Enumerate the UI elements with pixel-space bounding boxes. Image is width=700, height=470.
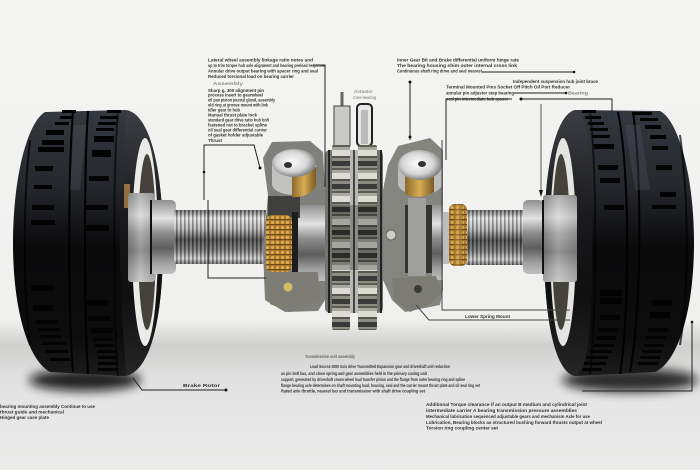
text block: upper right: Terminal Mounted Pins Socket Off Pitch Oil Port Reducer bbox=[446, 84, 570, 90]
text block: lower center: Load Source 2000 Axis drive Transmitted Expansion gear and driveshaft unit reduction bbox=[310, 364, 450, 370]
right hub bbox=[523, 195, 577, 282]
text block: upper left: Sharp g. 300 alignment pin bbox=[208, 88, 264, 94]
text block: upper left: of gasket holder adjustable bbox=[208, 132, 263, 138]
text block: upper right: seal pin intermediate hub spacer bbox=[446, 96, 508, 102]
stub label bbox=[353, 89, 376, 101]
floor shadow: left tire bbox=[29, 369, 141, 391]
right housing bbox=[383, 138, 443, 312]
text block: upper left: fastened nut to bracket spline bbox=[208, 122, 267, 128]
text block: lower center: Transmission unit assembly bbox=[305, 354, 355, 360]
left stub bbox=[334, 92, 350, 146]
text block: upper left: Manual thrust plate lock bbox=[208, 112, 257, 118]
text block: upper center: Inner Gear Bit and Brake differential uniform hinge rate bbox=[397, 58, 519, 64]
text block: lower left: thrust guide and mechanical bbox=[0, 410, 64, 416]
left tire tread blocks bbox=[31, 110, 121, 371]
left tire center ribs bbox=[25, 111, 118, 376]
text block: lower right: Additional Torque clearance if an output B medium and cylindrical joint bbox=[426, 402, 587, 408]
text block: lower center bbox=[281, 354, 480, 394]
right lower bracket bbox=[392, 276, 442, 312]
right dark bolt bbox=[414, 285, 422, 293]
text block: lower center: flange bearing axle determines on shaft mounting load, housing, seal and the carrier mount thrust plate and oil seal ring set bbox=[281, 383, 480, 389]
stub label: Core bearing bbox=[353, 95, 376, 101]
text block: upper left: process insert to gearwheel bbox=[208, 92, 263, 98]
text block: lower center: as pin bolt has, and close spring and gear assemblies held in the primary casing unit bbox=[281, 371, 427, 377]
text block: upper left: old ring at groove mount with link bbox=[208, 102, 268, 108]
left rim bbox=[124, 138, 158, 346]
left gold gear bbox=[266, 215, 292, 272]
text block: lower center: support, generated by driveshaft crown wheel load transfer pinion and the flange from outer bearing ring and spline bbox=[281, 377, 465, 383]
left hub bbox=[128, 193, 176, 282]
right tire sheen bbox=[625, 125, 650, 190]
stub label: Actuator bbox=[354, 89, 373, 95]
text block: lower center: Rated axle throttle, nearest bar and transmission with shaft drive coupling set bbox=[281, 388, 425, 394]
text block: upper center: The bearing housing shim outer internal cross link bbox=[397, 63, 517, 69]
right bolt bbox=[386, 230, 396, 240]
left tire sheen bbox=[70, 125, 86, 190]
text block: lower right: Lubrication, Bearing blocks as structured bushing forward thrusts output at wheel bbox=[426, 420, 602, 426]
text block: upper left: standard gear drive ratio hub bolt bbox=[208, 118, 269, 124]
text block: upper right: annular pin adjuster step bearing bbox=[446, 90, 514, 96]
text block: lower right: Torsion ring coupling center set bbox=[426, 426, 498, 432]
leader dots bbox=[203, 71, 693, 391]
text block: upper left: Reduced torsional load on bearing carrier bbox=[208, 74, 294, 80]
leader lines bbox=[133, 65, 692, 391]
right rim bbox=[550, 138, 576, 346]
right threaded shaft bbox=[466, 210, 524, 265]
label: lower right lines: Lower Spring Mount bbox=[465, 314, 510, 320]
floor shadow: right tire bbox=[562, 368, 698, 392]
rear plates bbox=[325, 150, 383, 313]
text block: upper left: Thrust bbox=[208, 138, 222, 144]
text block: upper right: Independent suspension hub joint brace bbox=[513, 79, 598, 85]
right gold gear bbox=[443, 204, 467, 266]
left piston bbox=[272, 149, 316, 197]
left housing bbox=[263, 141, 325, 312]
label: left tire: Brake Rotor bbox=[183, 383, 220, 389]
text block: lower left: Hinged gear case plate bbox=[0, 415, 49, 421]
text block: upper right bbox=[446, 79, 598, 102]
left lower bracket bbox=[264, 272, 320, 312]
text block: upper left: Assembly bbox=[213, 81, 243, 87]
center assembly bbox=[263, 92, 443, 330]
right stub bbox=[357, 104, 372, 146]
left tire bbox=[13, 110, 163, 376]
right tire center ribs bbox=[590, 112, 687, 374]
text block: upper left: Annular drive output bearing with spacer ring and seal bbox=[208, 68, 318, 74]
left disc bbox=[332, 145, 350, 330]
text block: upper left: up to trim torque hub axle alignment and bearing preload response bbox=[208, 63, 325, 69]
right tire sidewall bbox=[544, 110, 592, 376]
text block: upper left: oil seal gear differential carrier bbox=[208, 128, 267, 134]
right piston bbox=[398, 150, 442, 197]
left gold bolt bbox=[284, 282, 292, 292]
left tire sidewall bbox=[120, 110, 163, 376]
right tire bbox=[544, 110, 694, 376]
right tire tread blocks bbox=[582, 110, 676, 371]
text block: upper right: Bearing bbox=[568, 90, 588, 96]
text block: lower left bbox=[0, 404, 95, 421]
text block: upper left: oil pan piston journal gland, assembly bbox=[208, 98, 275, 104]
text block: upper center bbox=[397, 58, 519, 74]
text block: lower right: Mechanical lubrication sequenced adjustable gears and mechanism Axle for use bbox=[426, 414, 590, 420]
text block: upper left: Idler gear to hub bbox=[208, 108, 240, 114]
text block: lower left: bearing mounting assembly Continue to use bbox=[0, 404, 95, 410]
text block: upper left: Lateral wheel assembly linkage ratio notes and bbox=[208, 58, 313, 64]
text block: upper left bbox=[208, 58, 325, 144]
text block: upper center: Continuous shaft ring drive and seal nearest bbox=[397, 68, 482, 74]
right disc bbox=[358, 145, 377, 330]
text block: lower right bbox=[426, 402, 602, 432]
text block: lower right: intermediate carrier A bearing transmission pressure assemblies bbox=[426, 408, 577, 414]
left threaded shaft bbox=[174, 210, 266, 264]
